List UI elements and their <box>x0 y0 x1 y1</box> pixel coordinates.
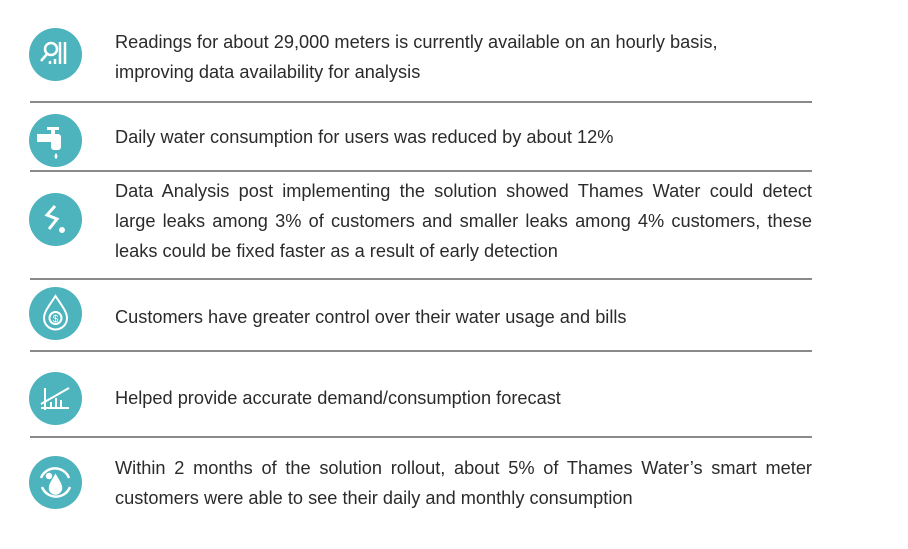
icon: forecast chart <box>29 372 82 425</box>
icon: cycle drop <box>29 456 82 509</box>
text: row 3: leaks could be fixed faster as a result of early detection <box>115 241 558 261</box>
icon: drop dollar: $ <box>53 314 59 325</box>
text: row 4: Customers have greater control over their water usage and bills <box>115 307 627 327</box>
icon: pipe <box>29 193 82 246</box>
icon: chart magnifier <box>29 28 82 81</box>
text: row 1: Readings for about 29,000 meters is currently available on an hourly basis, <box>115 32 718 52</box>
text: row 2: Daily water consumption for users was reduced by about 12% <box>115 127 613 147</box>
icon: drop dollar <box>29 287 82 340</box>
text: row 3: Data Analysis post implementing the solution showed Thames Water could detect <box>115 181 812 201</box>
text: row 5: Helped provide accurate demand/consumption forecast <box>115 388 561 408</box>
text: row 6 <box>115 458 812 508</box>
text: row 3 <box>115 181 812 261</box>
text: row 3: large leaks among 3% of customers and smaller leaks among 4% customers, these <box>115 211 812 231</box>
text: row 6: Within 2 months of the solution rollout, about 5% of Thames Water’s smart meter <box>115 458 812 478</box>
text: row 1: improving data availability for analysis <box>115 62 420 82</box>
text: row 6: customers were able to see their daily and monthly consumption <box>115 488 633 508</box>
text: row 1 <box>115 32 718 82</box>
icon: tap <box>29 114 82 167</box>
